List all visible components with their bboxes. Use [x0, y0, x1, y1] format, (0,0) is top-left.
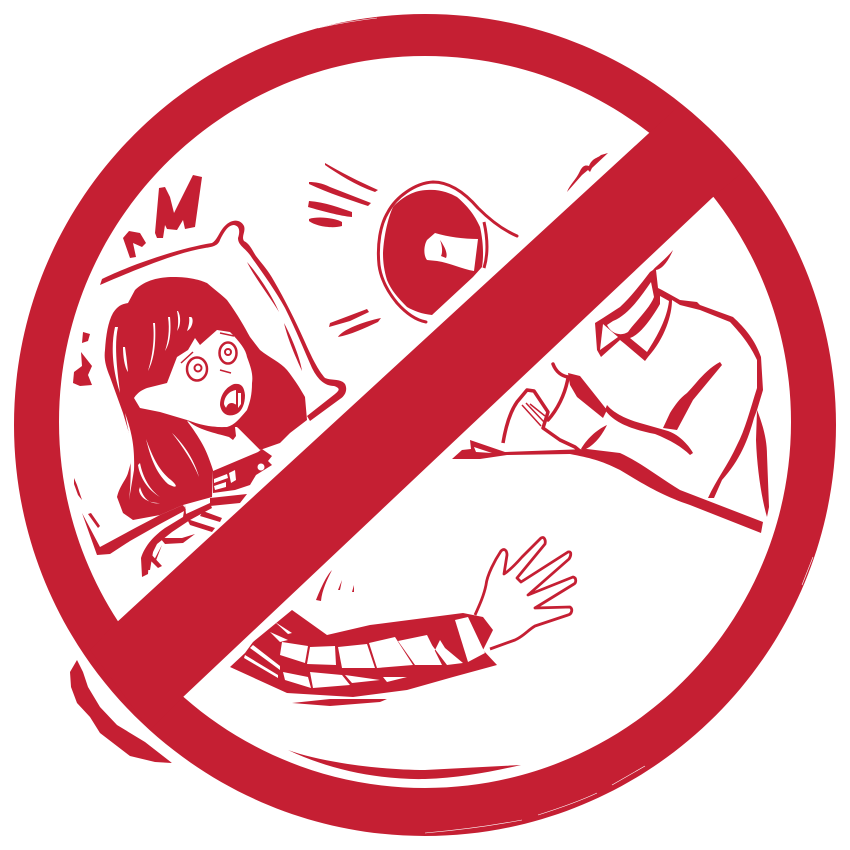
figure: reaching arm with hand — [230, 537, 576, 706]
woman's face — [134, 330, 252, 427]
lap line — [452, 440, 763, 533]
sleeve silhouette — [230, 610, 497, 697]
diagonal bar — [90, 105, 745, 730]
sleeve fold — [663, 362, 722, 430]
icon: snore marks — [73, 175, 202, 386]
figure: startled woman — [105, 277, 307, 577]
forearm — [605, 405, 693, 455]
woman's hair highlights — [113, 311, 199, 503]
collar — [595, 250, 763, 498]
outer brush stroke — [70, 660, 172, 763]
sleeve gaps — [244, 617, 485, 688]
icon: megaphone — [378, 182, 517, 322]
woman's hair — [105, 277, 307, 520]
book page hatching — [522, 403, 545, 426]
figure: shouting person's torso and arm — [452, 250, 769, 533]
detail: ground stroke — [288, 750, 521, 779]
open book shape — [503, 390, 581, 452]
cuff hook and edge — [548, 364, 568, 420]
woman's striped top — [141, 449, 272, 577]
woman's eyes and mouth — [181, 333, 245, 440]
icon: sound lines — [308, 153, 608, 337]
icon: sleeper's pillow — [74, 221, 346, 555]
cuff band — [568, 373, 607, 418]
woman's neck — [187, 421, 260, 470]
hand — [475, 537, 576, 649]
